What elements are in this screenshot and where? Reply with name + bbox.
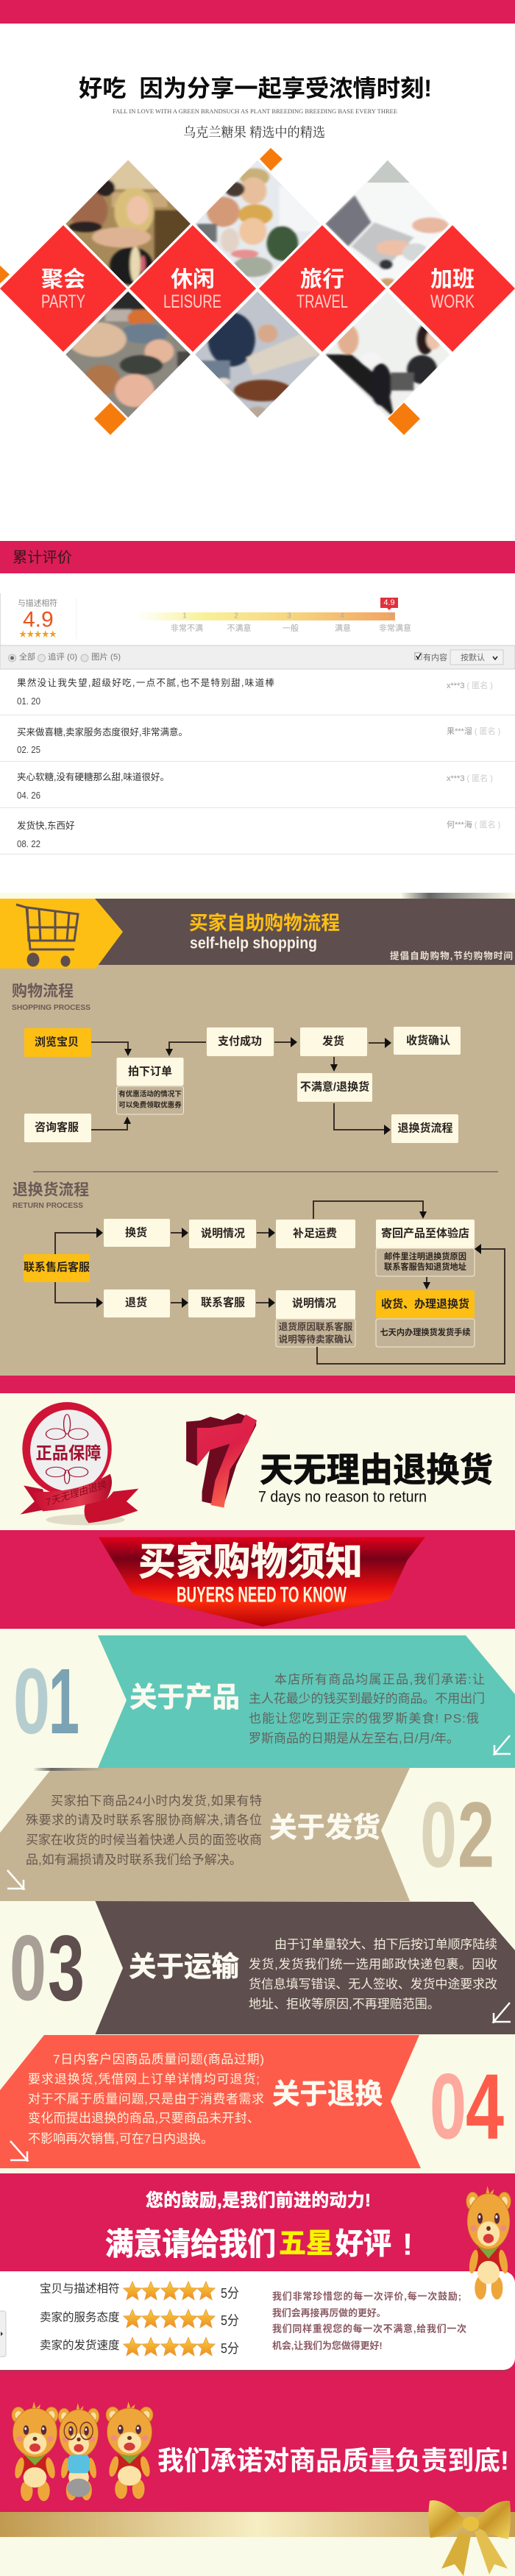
banner subtitle: BUYERS NEED TO KNOW: [177, 1582, 347, 1607]
panel: shopping process background: [0, 965, 515, 1376]
label: party: [41, 268, 85, 312]
flowchart: return process: [24, 1201, 505, 1364]
icon: bear mascot: [466, 2186, 511, 2299]
step: after-sales: 联系售后客服: [24, 1260, 90, 1273]
step: return flow: [391, 1114, 458, 1143]
photo: woman with hat: [63, 289, 193, 420]
gold band: [0, 2512, 515, 2537]
text block: 品,如有漏损请及时联系我们给予解决。: [26, 1853, 242, 1866]
rating scale bar: 不满意: [227, 623, 252, 633]
flowchart: shopping process: [24, 1027, 461, 1143]
panel: review list: [0, 677, 515, 854]
step: after-sales: [24, 1254, 90, 1282]
thank-you message: 我们同样重视您的每一次不满意,给我们一次: [272, 2323, 466, 2335]
number 04: [430, 2055, 504, 2158]
text block: 发货,发货我们统一选用邮政快递包裹。因收: [249, 1958, 497, 1971]
step: exchange: [104, 1219, 170, 1247]
text block: 不影响再次销售,可在7日内退换。: [28, 2131, 213, 2146]
section title: 关于发货: [269, 1813, 380, 1844]
section title: 关于退换: [272, 2079, 383, 2110]
rating score: 4.9: [23, 608, 54, 631]
label: party: PARTY: [41, 291, 85, 312]
label: travel: TRAVEL: [296, 291, 348, 312]
number 03: [10, 1917, 85, 2020]
photo: reading a book: [193, 289, 325, 420]
red diamonds: [0, 225, 515, 352]
photo: office meeting: [324, 289, 455, 420]
rating scale bar: 满意: [335, 623, 351, 633]
subtitle: 乌克兰糖果 精选中的精选: [183, 125, 325, 140]
panel: about returns: [0, 2035, 504, 2168]
step: unsatisfied: [297, 1073, 372, 1102]
step: contact: 联系客服: [201, 1295, 245, 1309]
thank-you message: 我们非常珍惜您的每一次评价,每一次鼓励;: [272, 2290, 461, 2302]
heading: shopping process: 购物流程: [12, 983, 74, 999]
review 2: 02. 25: [17, 745, 40, 755]
step: return: [104, 1289, 170, 1317]
number 02: 0: [420, 1783, 457, 1887]
rating score: 与描述相符: [18, 598, 57, 608]
step: pay freight: 补足运费: [293, 1226, 337, 1239]
arrow: consult to order: [91, 1117, 131, 1130]
row: service: 5分: [221, 2313, 239, 2328]
arrow icon: [10, 2141, 27, 2162]
panel: filter bar: [0, 645, 515, 669]
number 03: 3: [48, 1917, 85, 2020]
panel: five star request: [0, 2173, 515, 2512]
text block: 本店所有商品均属正品,我们承诺:让: [274, 1672, 485, 1687]
arrow icon: [494, 1735, 511, 1755]
arrow icon: [494, 2003, 511, 2023]
arrow: pay to ship: [274, 1037, 297, 1047]
footer cream: [0, 2537, 515, 2576]
panel: about shipping: [0, 1768, 494, 1901]
label: leisure: [163, 268, 221, 312]
arrow icon: [7, 1870, 24, 1890]
step: explain: [189, 1220, 256, 1248]
headline line 2: !: [402, 2227, 413, 2261]
panel: reviews header band: [0, 541, 515, 573]
rating scale bar: 5: [390, 612, 394, 620]
label: leisure: LEISURE: [163, 291, 221, 312]
text block: [28, 2052, 264, 2146]
review 4: [17, 819, 500, 849]
title: 好吃 因为分享一起享受浓情时刻!: [79, 75, 432, 102]
heading: shopping process: [12, 983, 90, 1012]
top pink bar: [0, 0, 515, 24]
step: order: 拍下订单: [128, 1064, 172, 1078]
review 4: 何***海 ( 匿名 ): [447, 819, 500, 829]
number 03: 0: [10, 1917, 46, 2020]
rating scale bar: 2: [234, 612, 238, 620]
review 3: 04. 26: [17, 790, 40, 801]
heading: 买家自助购物流程: [189, 912, 340, 934]
row: delivery speed: 5分: [221, 2341, 239, 2356]
text block: [249, 1937, 497, 2011]
step: unsatisfied: 不满意/退换货: [300, 1080, 369, 1094]
label: leisure: 休闲: [171, 268, 215, 291]
rating scale bar: 一般: [283, 623, 299, 633]
thank-you message: [272, 2290, 466, 2351]
decorative orange diamonds: [0, 148, 420, 435]
arrow: contact to explain: [256, 1298, 275, 1308]
step: return: 退货: [125, 1295, 147, 1309]
number 01: 1: [49, 1649, 79, 1753]
arrow: after-sales to exchange: [55, 1228, 103, 1254]
step: consult: [24, 1114, 91, 1142]
step: contact: [188, 1289, 255, 1317]
promise slogan: 我们承诺对商品质量负责到底!: [157, 2445, 509, 2476]
step: send back: [376, 1220, 475, 1248]
review 2: 果***溜 ( 匿名 ): [447, 726, 500, 736]
label: work: 加班: [430, 268, 475, 291]
icon: shopping cart: [16, 905, 78, 967]
text block: 由于订单量较大、拍下后按订单顺序陆续: [274, 1937, 497, 1952]
text block: 买家拍下商品24小时内发货,如果有特: [51, 1794, 262, 1808]
badge: genuine guarantee: 7天无理由退换: [44, 1479, 108, 1508]
arrow: return to contact: [171, 1298, 188, 1308]
thank-you message: 机会,让我们为您做得更好!: [272, 2340, 383, 2351]
icon: three bears: [12, 2402, 153, 2501]
arrow: ship to unsatisfied: [330, 1057, 338, 1072]
headline line 2: 五星: [279, 2229, 333, 2260]
rating card: [0, 2271, 515, 2371]
photo: party couple: [65, 160, 191, 287]
panel: reviews header band: 累计评价: [13, 549, 72, 566]
panel: notice background: [0, 1629, 515, 2173]
review 2: [17, 726, 500, 755]
step: browse: [24, 1028, 91, 1057]
step: consult: 咨询客服: [35, 1120, 79, 1133]
text block: 主人花最少的钱买到最好的商品。不用出门: [249, 1691, 485, 1706]
text block: 要求退换货,凭借网上订单详情均可退货;: [28, 2073, 260, 2086]
row: description: 宝贝与描述相符: [40, 2282, 120, 2295]
rating scale bar: 3: [287, 612, 291, 620]
heading: return process: [13, 1181, 89, 1210]
step: ship: [300, 1027, 367, 1056]
rating scale bar: [136, 612, 411, 633]
review 2: 买来做喜糖,卖家服务态度很好,非常满意。: [17, 726, 188, 737]
arrow: exchange to explain: [171, 1228, 188, 1238]
step: explain 2: [276, 1290, 355, 1319]
badge: genuine guarantee: [21, 1402, 138, 1525]
step: confirm: [394, 1027, 461, 1055]
panel: rating summary: [0, 593, 411, 645]
rating scale bar: 非常不满: [171, 623, 203, 633]
review 3: [17, 771, 493, 801]
step: process return: 收货、办理退换货: [381, 1297, 469, 1310]
subheading: self-help shopping: [190, 933, 317, 952]
strip above process header: [0, 893, 515, 899]
panel: filter bar: 图片 (5): [91, 652, 121, 662]
text block: 对于不属于质量问题,只是由于消费者需求: [28, 2092, 264, 2106]
row: delivery speed: 卖家的发货速度: [40, 2339, 120, 2352]
arrow: pay to order: [166, 1042, 206, 1056]
note: return reason: 退货原因联系客服: [279, 1321, 353, 1332]
headline line 2: [105, 2227, 413, 2261]
score tag: 4.9: [383, 598, 395, 607]
icon: big 3D seven: [186, 1413, 257, 1507]
row: delivery speed: [40, 2338, 239, 2356]
step: send back: 寄回产品至体验店: [381, 1226, 469, 1239]
text block: 买家在收货的时候当着快递人员的面签收商: [26, 1833, 262, 1847]
panel: about product: [13, 1635, 515, 1768]
review 3: 夹心软糖,没有硬糖那么甜,味道很好。: [17, 771, 169, 782]
step: explain 2: 说明情况: [292, 1297, 336, 1310]
panel: filter bar: 追评 (0): [48, 651, 77, 662]
label: party: 聚会: [41, 268, 85, 291]
text block: 殊要求的请及时联系客服协商解决,请各位: [26, 1814, 262, 1827]
arrow: after-sales to return: [55, 1282, 103, 1308]
photo: laptop: [325, 160, 450, 287]
row: description: 5分: [221, 2286, 239, 2301]
text block: 罗斯商品的日期是从左至右,日/月/年。: [249, 1731, 459, 1746]
review 4: 发货快,东西好: [17, 820, 74, 831]
note: seven days: [376, 1319, 475, 1347]
note: return reason: 说明等待卖家确认: [279, 1334, 353, 1345]
section title: 关于产品: [129, 1682, 240, 1713]
arrow: unsatisfied to return flow: [334, 1103, 391, 1135]
step: pay freight: [276, 1220, 355, 1248]
headline line 1: 您的鼓励,是我们前进的动力!: [146, 2190, 371, 2211]
panel: about delivery: [10, 1901, 515, 2034]
step: exchange: 换货: [125, 1226, 147, 1239]
review 4: 08. 22: [17, 839, 40, 849]
note: mail: 联系客服告知退货地址: [384, 1262, 466, 1272]
step: explain: 说明情况: [201, 1226, 245, 1239]
number 01: 0: [13, 1649, 50, 1753]
row: service: 卖家的服务态度: [40, 2311, 120, 2324]
text block: 变化而提出退换的商品,只要商品未开封、: [28, 2111, 260, 2126]
note: mail: 邮件里注明退换货原因: [384, 1251, 466, 1262]
note: coupon: 可以免费领取优惠券: [118, 1101, 182, 1110]
step: process return: [376, 1290, 475, 1318]
label: work: [430, 268, 475, 312]
heading: shopping process: SHOPPING PROCESS: [12, 1003, 90, 1012]
note: mail: [376, 1248, 475, 1276]
number 04: 0: [430, 2055, 466, 2158]
headline: 天无理由退换货: [260, 1451, 493, 1489]
note: coupon: 有优惠活动的情况下: [118, 1089, 182, 1098]
icon: gold bow: [428, 2500, 511, 2576]
headline line 2: 满意请给我们: [105, 2227, 276, 2261]
rating scale bar: 1: [182, 612, 187, 620]
review 1: 果然没让我失望,超级好吃,一点不腻,也不是特别甜,味道棒: [17, 677, 274, 688]
label: travel: 旅行: [300, 268, 344, 291]
step: ship: 发货: [322, 1035, 344, 1048]
step: pay: [207, 1027, 274, 1056]
side tab: [0, 2311, 6, 2357]
number 02: 2: [458, 1783, 494, 1887]
step: pay: 支付成功: [218, 1035, 262, 1048]
heading: return process: RETURN PROCESS: [13, 1201, 83, 1210]
note: coupon: [116, 1086, 184, 1114]
panel: pink divider: [0, 1376, 515, 1393]
score tag: [380, 598, 398, 610]
arrow: explain to freight: [257, 1228, 275, 1238]
text block: 地址、拒收等原因,不再理赔范围。: [249, 1998, 440, 2011]
review 1: 01. 20: [17, 696, 40, 707]
review 1: [17, 677, 493, 707]
label: travel: [296, 268, 348, 312]
review 1: x***3 ( 匿名 ): [447, 680, 493, 690]
section title: 关于运输: [129, 1952, 239, 1983]
slogan: 提倡自助购物,节约购物时间: [390, 950, 513, 961]
row: description: [40, 2282, 239, 2301]
english caption: 7 days no reason to return: [258, 1488, 427, 1506]
review 3: x***3 ( 匿名 ): [447, 773, 493, 783]
note: seven days: 七天内办理换货发货手续: [380, 1327, 471, 1337]
rating scale bar: 4: [340, 612, 344, 620]
arrow: ship to confirm: [369, 1038, 391, 1048]
step: order: [116, 1058, 184, 1086]
banner title: 买家购物须知: [138, 1541, 363, 1584]
rating scale bar: 非常满意: [379, 623, 411, 633]
label: work: WORK: [430, 291, 475, 312]
english tagline: FALL IN LOVE WITH A GREEN BRANDSUCH AS PLANT BREEDING BREEDING BASE EVERY THREE: [113, 107, 397, 115]
panel: filter bar: 按默认: [461, 652, 485, 662]
text block: [249, 1672, 485, 1746]
step: browse: 浏览宝贝: [35, 1035, 79, 1048]
thank-you message: 我们会再接再厉做的更好。: [272, 2307, 386, 2318]
banner shape: [99, 1537, 425, 1627]
note: return reason: [276, 1319, 355, 1347]
panel: buyers need to know: [0, 1530, 515, 1629]
text block: 7日内客户因商品质量问题(商品过期): [53, 2052, 264, 2067]
rating score: ★★★★★: [19, 630, 57, 639]
text block: 也能让您吃到正宗的俄罗斯美食! PS:俄: [249, 1712, 479, 1725]
photo: family leisure: [196, 160, 319, 287]
panel: filter bar: 全部: [19, 651, 35, 662]
row: service: [40, 2310, 239, 2328]
rating score: [18, 598, 57, 639]
panel: seven day guarantee: [0, 1393, 515, 1530]
badge: genuine guarantee: 正品保障: [35, 1443, 102, 1462]
headline line 2: 好评: [335, 2228, 391, 2260]
text block: [26, 1794, 262, 1866]
panel: diamond photo grid: [0, 148, 515, 435]
arrow: browse to order: [91, 1042, 132, 1056]
arrow: freight to send back: [313, 1201, 427, 1219]
arrow: return reason loop: [317, 1244, 505, 1364]
number 02: [420, 1783, 494, 1887]
panel: filter bar: 有内容: [423, 652, 447, 662]
arrow: send back to process: [423, 1277, 430, 1289]
text block: 货信息填写错误、无人签收、发货中途要求改: [249, 1977, 497, 1992]
step: return flow: 退换货流程: [397, 1122, 453, 1135]
heading: return process: 退换货流程: [13, 1181, 89, 1198]
step: confirm: 收货确认: [406, 1033, 450, 1047]
panel: self-help header: [0, 899, 515, 969]
